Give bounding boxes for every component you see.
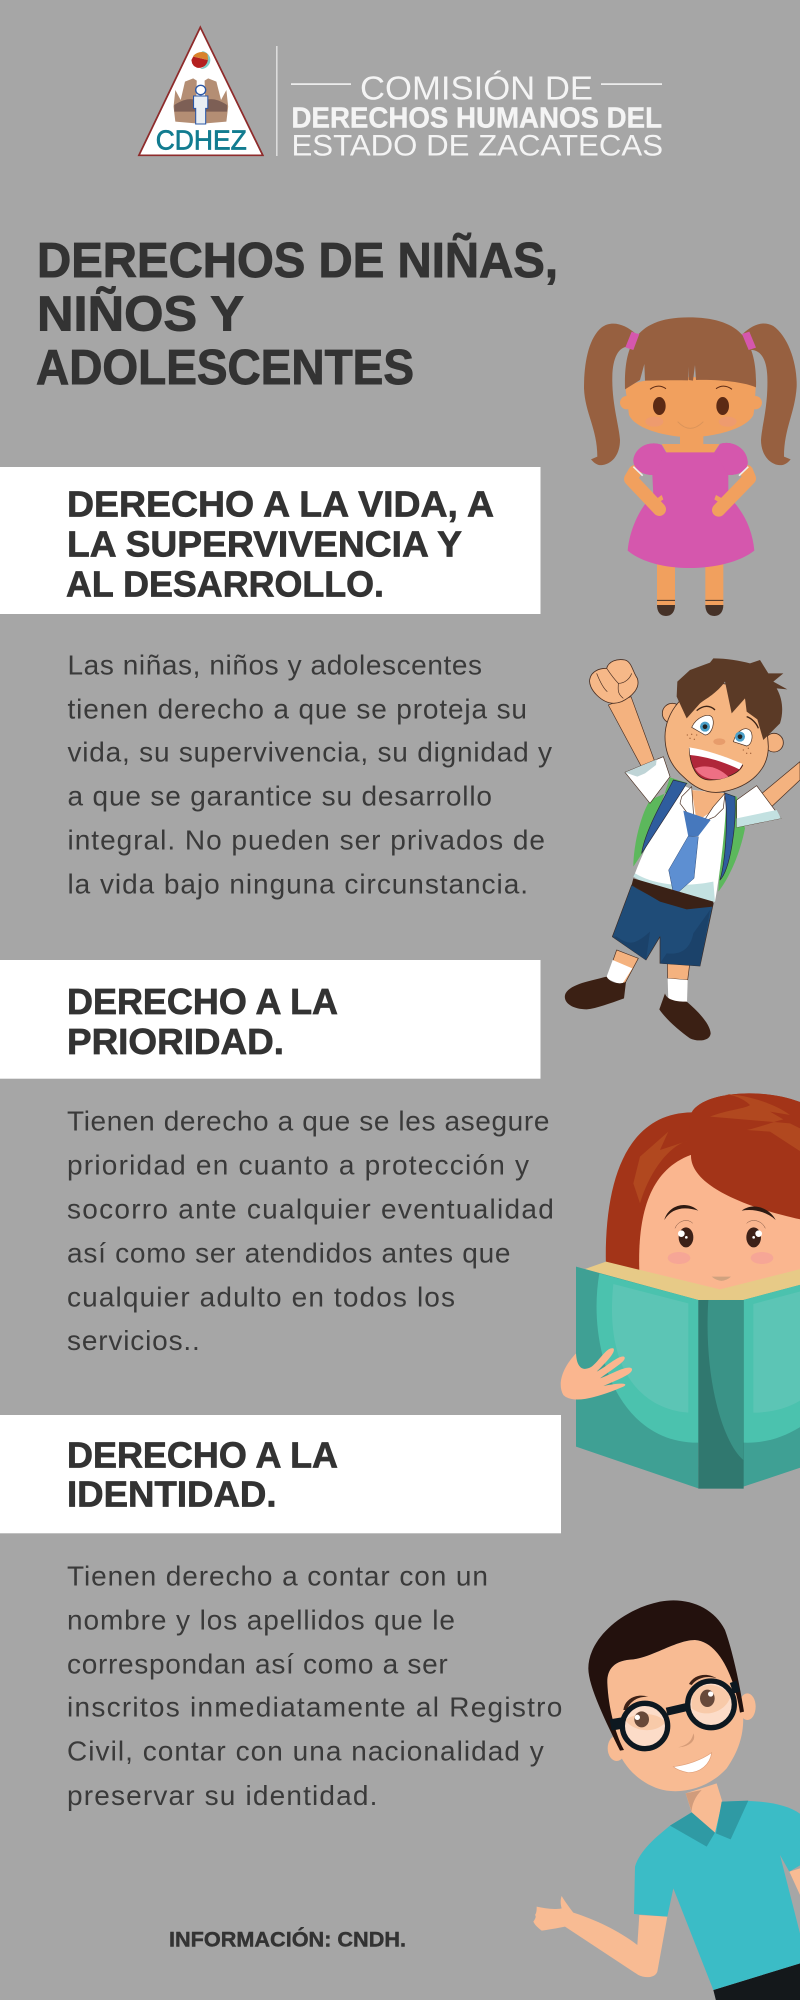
title (36, 232, 558, 395)
panel: heading derecho a la vida: LA SUPERVIVENCIA Y (67, 524, 462, 565)
text block: derecho a la prioridad: servicios.. (67, 1325, 200, 1356)
text block: derecho a la identidad: preservar su identidad. (67, 1780, 377, 1811)
icon: triangle emblem: CDHEZ (156, 124, 247, 155)
illustration: cheering schoolboy (565, 658, 800, 1040)
panel: heading derecho a la vida (0, 467, 540, 614)
text block: derecho a la vida: vida, su supervivencia, su dignidad y (68, 737, 552, 768)
text block: derecho a la vida: la vida bajo ninguna circunstancia. (68, 868, 528, 899)
text block: derecho a la identidad: nombre y los apellidos que le (67, 1604, 455, 1635)
panel: heading derecho a la identidad: IDENTIDAD. (67, 1474, 276, 1515)
text block: derecho a la vida: integral. No pueden ser privados de (68, 824, 545, 855)
text block: derecho a la vida (68, 649, 552, 899)
text block: derecho a la identidad: Tienen derecho a contar con un (67, 1561, 488, 1592)
logo wordmark (291, 69, 663, 162)
text block: derecho a la identidad (67, 1561, 562, 1811)
title: DERECHOS DE NIÑAS, (37, 232, 558, 288)
illustration: boy with glasses (533, 1600, 800, 2000)
title: ADOLESCENTES (36, 340, 414, 395)
logo wordmark: DERECHOS HUMANOS DEL (292, 102, 662, 134)
text block: derecho a la vida: tienen derecho a que se proteja su (68, 693, 527, 724)
text block: derecho a la prioridad: prioridad en cuanto a protección y (67, 1150, 529, 1181)
text block: derecho a la prioridad (67, 1106, 554, 1356)
text block: derecho a la identidad: Civil, contar con una nacionalidad y (67, 1736, 544, 1767)
text block: derecho a la prioridad: cualquier adulto en todos los (67, 1282, 455, 1313)
text block: derecho a la vida: a que se garantice su desarrollo (68, 781, 492, 812)
icon: triangle emblem (139, 27, 263, 155)
title: NIÑOS Y (37, 286, 244, 342)
logo wordmark: COMISIÓN DE (360, 69, 593, 106)
text block: derecho a la prioridad: así como ser atendidos antes que (67, 1237, 510, 1268)
panel: heading derecho a la prioridad: PRIORIDAD. (67, 1021, 284, 1062)
text block: derecho a la identidad: correspondan así como a ser (67, 1648, 448, 1679)
text block: derecho a la vida: Las niñas, niños y adolescentes (68, 649, 482, 680)
logo divider (276, 46, 278, 156)
panel: heading derecho a la identidad: DERECHO A LA (67, 1434, 338, 1475)
illustration: girl with pigtails (584, 317, 797, 616)
text block: derecho a la prioridad: Tienen derecho a que se les asegure (67, 1106, 549, 1137)
text block: derecho a la identidad: inscritos inmediatamente al Registro (67, 1692, 562, 1723)
panel: heading derecho a la identidad (0, 1415, 561, 1533)
source credit: INFORMACIÓN: CNDH. (169, 1928, 406, 1952)
logo: CDHEZ commission (139, 27, 663, 162)
panel: heading derecho a la vida: AL DESARROLLO. (66, 564, 384, 605)
text block: derecho a la prioridad: socorro ante cualquier eventualidad (67, 1194, 554, 1225)
panel: heading derecho a la prioridad: DERECHO A LA (67, 981, 338, 1022)
panel: heading derecho a la vida: DERECHO A LA VIDA, A (67, 484, 494, 525)
illustration: child reading a book (561, 1093, 800, 1489)
panel: heading derecho a la prioridad (0, 960, 540, 1079)
logo wordmark: ESTADO DE ZACATECAS (292, 130, 663, 162)
